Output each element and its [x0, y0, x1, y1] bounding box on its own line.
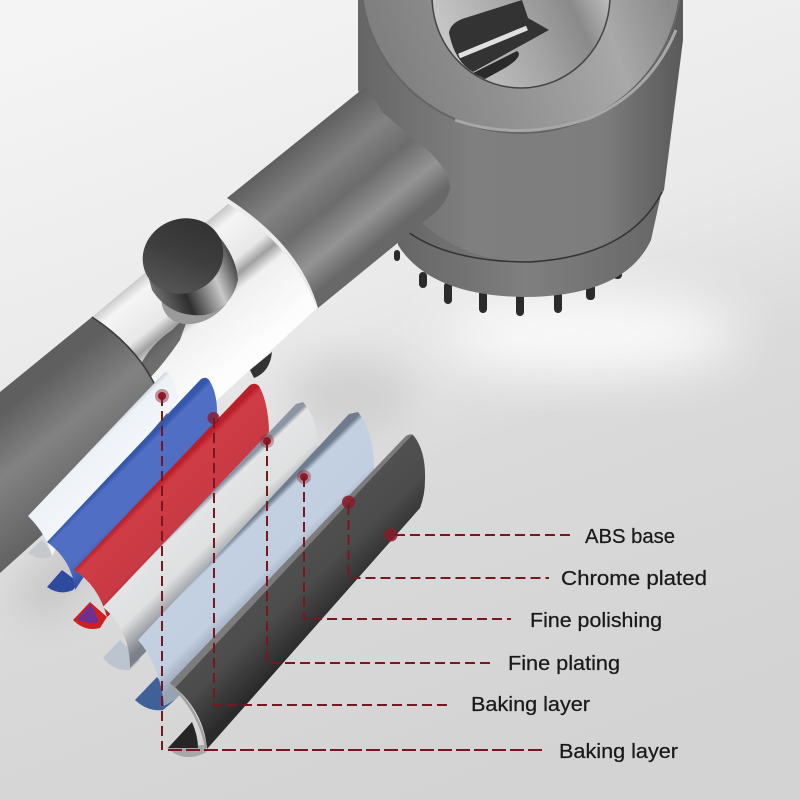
dot — [300, 473, 308, 481]
marker dot — [342, 496, 355, 508]
layer: blue — [47, 378, 218, 592]
callout: Chrome plated — [342, 496, 707, 590]
marker halo and dot — [297, 470, 311, 484]
layer: dark grey — [167, 434, 425, 757]
red face — [74, 384, 269, 617]
label: Fine plating — [508, 652, 620, 675]
leader line — [267, 441, 490, 663]
purple inner foot — [77, 604, 99, 623]
label: Chrome plated — [561, 567, 707, 590]
blue face — [47, 378, 218, 590]
label: Fine polishing — [530, 609, 662, 632]
button side — [146, 222, 238, 315]
halo — [297, 470, 311, 484]
pale blue face — [138, 412, 374, 706]
dark face — [170, 434, 425, 749]
white face — [28, 372, 178, 556]
push button — [130, 205, 248, 338]
tab highlight — [459, 28, 527, 56]
tab dark body — [449, 0, 549, 72]
layer: ABS white — [28, 372, 178, 558]
marker halo and dot — [260, 434, 274, 448]
spray selector tab — [449, 0, 549, 79]
chrome dark reflection — [140, 312, 190, 378]
dot — [158, 392, 166, 400]
halo — [260, 434, 274, 448]
button chrome base — [148, 242, 248, 338]
red foot — [73, 602, 107, 629]
callout: Fine polishing — [297, 470, 662, 632]
marker halo and dot — [155, 389, 169, 403]
handle shadow — [10, 450, 170, 625]
shower head product photo — [0, 0, 683, 625]
bottom leader line — [168, 749, 543, 751]
reflection under the head — [440, 297, 740, 373]
dark foot bottom rim — [167, 745, 207, 757]
tab slot — [473, 51, 519, 79]
small dark underside of handle — [250, 352, 272, 378]
shadow right of layers — [290, 355, 410, 435]
label: Baking layer — [471, 693, 590, 716]
dark inner curve rim — [172, 686, 206, 748]
marker dot — [384, 528, 398, 542]
callout: ABS base — [384, 525, 675, 548]
silver face — [103, 402, 318, 668]
pale blue foot — [135, 677, 175, 710]
shower head lower body — [396, 190, 662, 297]
shower head nozzle pins — [394, 250, 622, 316]
label: Baking layer — [559, 740, 678, 763]
shower head upper body — [358, 0, 683, 262]
label: ABS base — [585, 525, 675, 548]
layer: pale blue — [135, 412, 374, 710]
collar edge — [92, 317, 155, 385]
grey arm joining the head — [227, 87, 450, 308]
silver foot — [103, 640, 140, 670]
callout: Fine plating — [260, 434, 620, 675]
callout: Baking layer (white) — [155, 389, 678, 763]
seam between upper and lower body — [408, 192, 662, 262]
white foot — [28, 540, 52, 558]
marker dot — [208, 412, 220, 424]
ring highlight rim — [455, 30, 676, 131]
chrome centre disc — [432, 0, 610, 88]
halo — [155, 389, 169, 403]
dot — [263, 437, 271, 445]
leader line — [395, 534, 570, 536]
chrome collar — [92, 204, 317, 425]
leader line — [348, 505, 549, 578]
dark foot interior — [168, 722, 198, 748]
layer: fine polished silver — [103, 402, 318, 670]
leader line — [161, 396, 163, 750]
dark top lip — [170, 434, 413, 688]
button top — [130, 205, 236, 307]
leader line — [304, 477, 511, 619]
callout: Baking layer (blue) — [208, 412, 590, 716]
layer: red — [73, 384, 269, 629]
shower head top ring — [361, 0, 681, 133]
blue foot — [47, 570, 78, 592]
leader line — [214, 418, 452, 705]
exploded coating layers — [28, 372, 425, 757]
grey lower handle — [0, 317, 170, 573]
